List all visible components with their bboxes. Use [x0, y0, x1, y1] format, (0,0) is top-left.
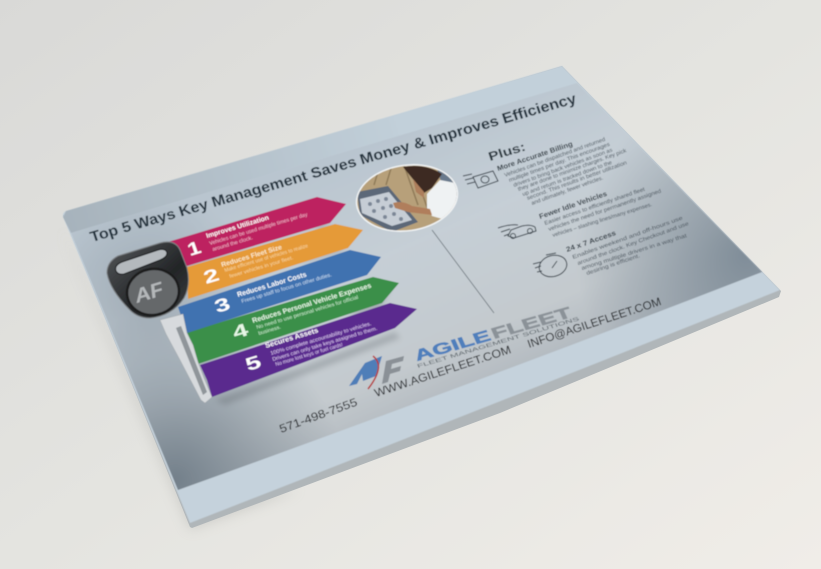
photo wall — [356, 165, 442, 231]
ribbon 1 text: 1 — [185, 238, 204, 260]
icon: key — [107, 242, 212, 403]
logo: FLEET MANAGEMENT SOLUTIONS — [416, 316, 581, 370]
ribbon 1 pink — [168, 197, 346, 266]
icon: car — [498, 225, 536, 238]
email: INFO@AGILEFLEET.COM — [526, 295, 663, 351]
logo wordmark: AGILE — [412, 328, 494, 365]
brochure page edges — [63, 66, 781, 528]
ribbon 5 text: Drivers can only take keys assigned to them. — [272, 326, 378, 363]
phone: 571-498-7555 — [278, 396, 360, 436]
plus 2 text: vehicles the need for permanently assigned — [548, 189, 662, 233]
ribbon 4 text: business. — [258, 325, 282, 337]
plus 1 text: multiple times per day. This encourages — [508, 142, 611, 184]
ribbon 4 green — [187, 277, 399, 364]
key blade — [160, 314, 212, 403]
photo key cabinet — [357, 186, 418, 232]
plus 3 text — [565, 216, 690, 277]
key logo letters: AF — [131, 278, 168, 308]
ribbon 5 text: 5 — [243, 351, 264, 375]
plus heading: Plus: — [487, 140, 527, 164]
ribbon shadows — [215, 225, 400, 405]
plus 1 text: second. This results in better utilization — [526, 160, 628, 202]
ribbon 5 text: 100% complete accountability to vehicles. — [270, 321, 372, 357]
logo mark — [349, 356, 404, 389]
logo: FLEET — [489, 305, 575, 343]
main gradient panel — [60, 70, 780, 500]
ribbon 4 text: 4 — [230, 319, 251, 343]
ribbon 3 text: Reduces Labor Costs — [236, 270, 308, 299]
plus 3 text: Enables weekend and off-hours use — [572, 216, 684, 261]
brochure shadow — [60, 225, 300, 530]
ribbon 4 text: No need to use personal vehicles for official — [256, 295, 359, 331]
ribbon 5 purple — [200, 303, 417, 397]
ribbon 3 text: Frees up staff to focus on other duties. — [241, 272, 333, 305]
ribbon 4 text: Reduces Personal Vehicle Expenses — [251, 281, 372, 325]
ribbon 3 text — [212, 270, 333, 317]
ribbon 5 text: Secures Assets — [264, 326, 319, 350]
key blade groove — [176, 326, 207, 395]
plus 2 text: vehicles – slashing lines/many expenses. — [552, 202, 653, 239]
plus 2 text: Fewer Idle Vehicles — [538, 189, 608, 221]
ribbon 4 text — [230, 281, 372, 343]
divider — [432, 230, 494, 313]
icon: stopwatch — [533, 252, 569, 280]
plus 1 text: up and return is tracked down to the — [522, 160, 613, 198]
key slot — [116, 249, 167, 274]
ribbon 1 text: Improves Utilization — [205, 215, 270, 240]
plus 1 text: Vehicles can be dispatched and returned — [504, 137, 606, 179]
plus 2 text — [538, 187, 662, 239]
ribbon 2 text: Reduces Fleet Size — [220, 244, 283, 269]
photo blue backdrop — [437, 170, 454, 183]
plus 1 text: they are done to minimize charges. Key pick — [517, 148, 627, 193]
plus 3 text: 24 x 7 Access — [565, 228, 617, 254]
ribbon 1 text — [185, 212, 309, 260]
ribbon 2 text — [201, 243, 309, 288]
plus 3 text: desiring is efficient. — [586, 253, 641, 277]
logo — [349, 305, 581, 389]
plus 1 text: drivers to bring back vehicles as soon as — [513, 148, 613, 189]
ribbon 2 text: fewer vehicles in your fleet. — [229, 255, 294, 280]
icon: money — [463, 171, 498, 188]
ribbon 5 text — [243, 321, 378, 375]
plus 1 text: and ultimately, fewer vehicles. — [531, 175, 604, 207]
ribbon 2 orange — [187, 224, 363, 299]
photo person — [426, 180, 458, 219]
ribbon 3 text: 3 — [212, 293, 233, 317]
top strip — [63, 66, 577, 233]
plus 3 text: among multiple drivers in a way that — [581, 233, 688, 272]
plus 1 text: More Accurate Billing — [496, 139, 574, 173]
ribbon 5 text: No more lost keys or fuel cards! — [275, 342, 344, 368]
photo circle — [355, 164, 459, 232]
ribbon 3 blue — [178, 250, 381, 333]
ribbon 2 text: Make efficient use of vehicles to realize — [224, 243, 309, 274]
ribbons — [168, 197, 417, 405]
brochure cover — [63, 66, 780, 523]
plus 3 text: around the clock. Key Checkout and use — [577, 221, 690, 267]
ribbon 2 text: 2 — [201, 264, 222, 288]
ribbon 1 text: Vehicles can be used multiple times per day — [209, 212, 309, 247]
title: Top 5 Ways Key Management Saves Money & Improves Efficiency — [88, 90, 579, 246]
ribbon 1 text: around the clock. — [212, 235, 254, 253]
key logo disc — [123, 265, 183, 319]
website: WWW.AGILEFLEET.COM — [373, 343, 513, 400]
plus 2 text: Easier access to efficiently shared fleet — [544, 187, 646, 227]
plus 1 text — [496, 137, 628, 207]
key head — [107, 242, 188, 318]
